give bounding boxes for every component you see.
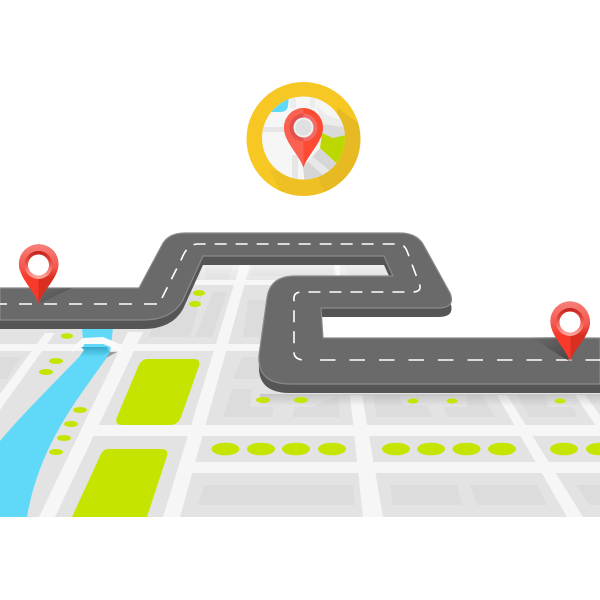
- hole fade: [200, 265, 388, 276]
- badge ring shadow: [280, 108, 360, 196]
- road surface: [0, 233, 600, 384]
- map streets: [0, 265, 600, 517]
- river: [0, 328, 113, 517]
- location pin: left: [19, 244, 58, 304]
- green tree dots: [39, 290, 600, 455]
- road side wall: [0, 242, 600, 393]
- map blocks: [0, 265, 600, 505]
- route map illustration: [0, 82, 600, 517]
- shadow under road: [260, 394, 600, 404]
- badge yellow ring: [246, 82, 360, 196]
- green parks: [72, 359, 199, 517]
- top location badge: [246, 82, 365, 198]
- pin shadow: right: [530, 337, 569, 361]
- badge map disc: [262, 96, 345, 180]
- bridge: [72, 337, 122, 358]
- badge pin: [284, 108, 323, 168]
- road centre dashes: [0, 244, 600, 360]
- pin shadow: left: [40, 288, 72, 303]
- winding road: [0, 233, 600, 393]
- city map base: [0, 255, 600, 517]
- location pin: right: [550, 301, 590, 362]
